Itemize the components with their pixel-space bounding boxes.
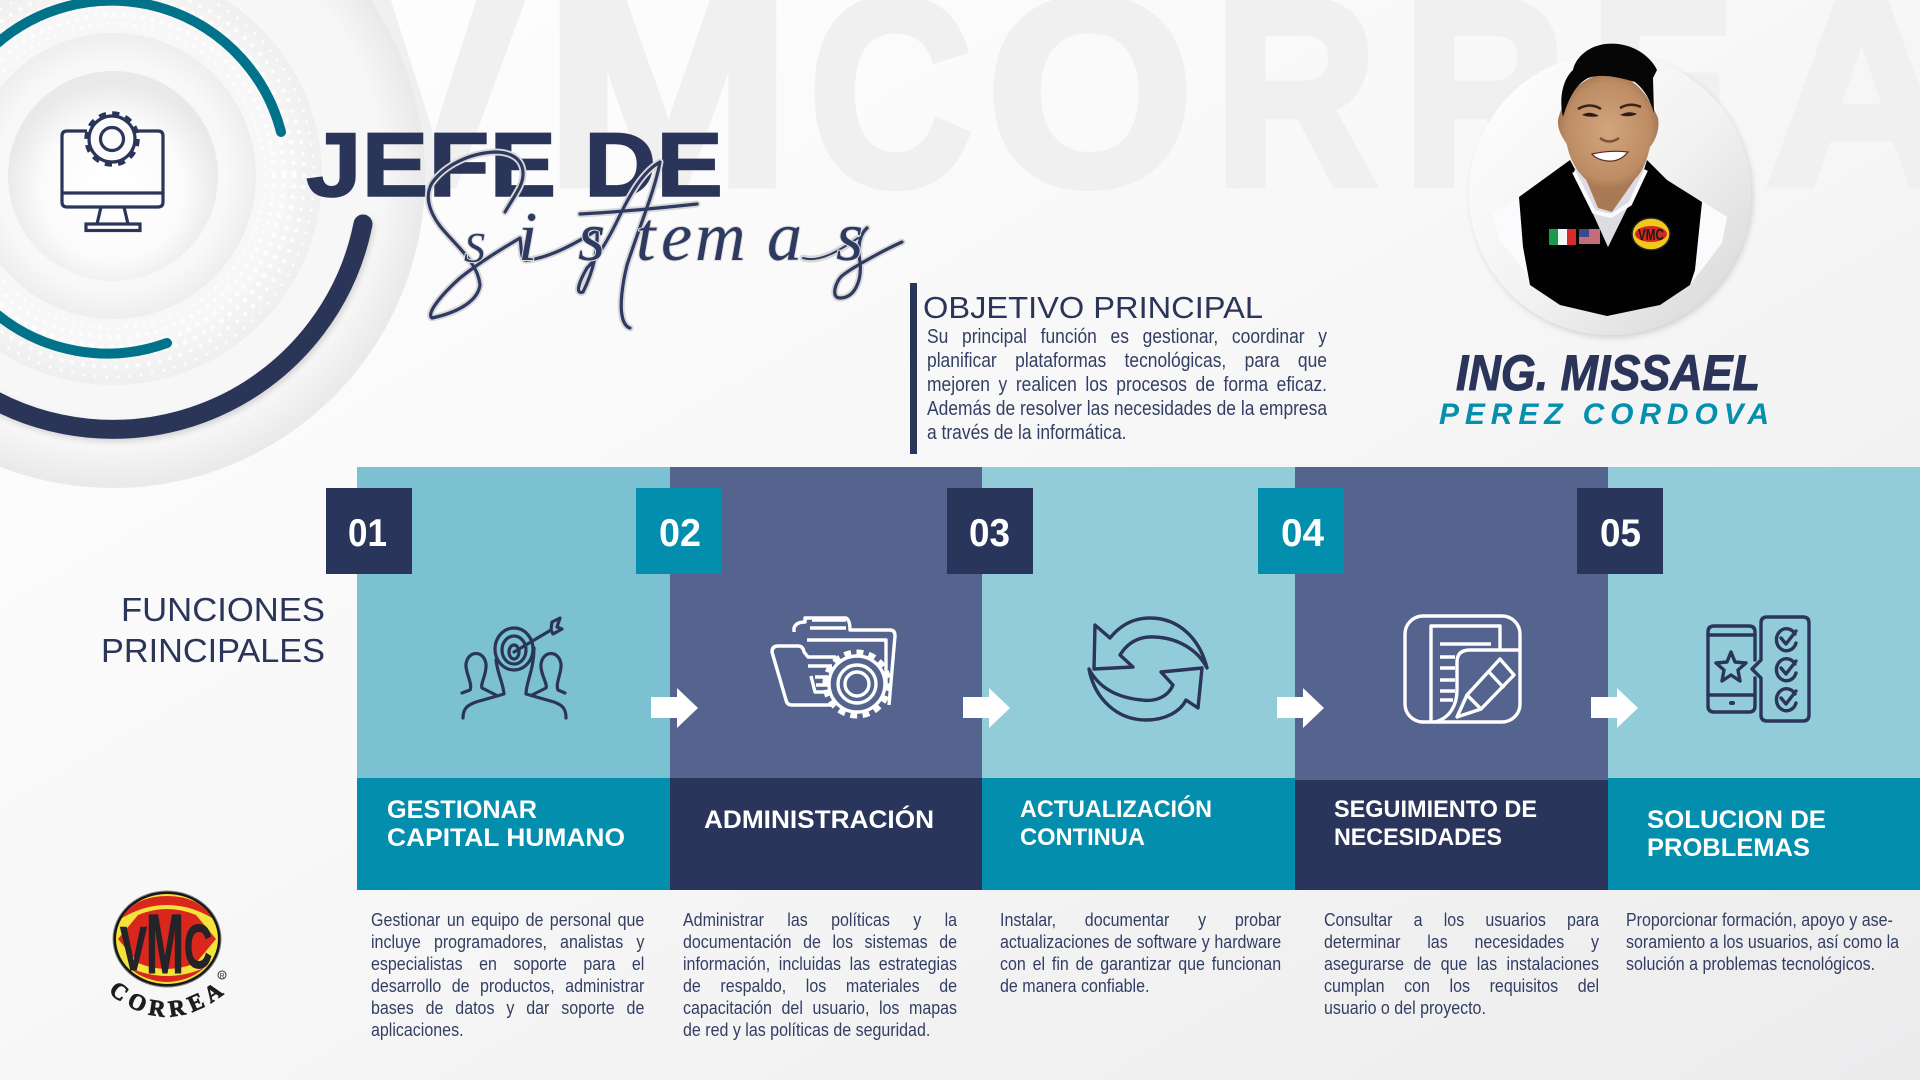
eyebrows xyxy=(1578,105,1641,109)
description: actualizacion: de manera confiable. xyxy=(1000,975,1149,996)
objective text: a través de la informática. xyxy=(926,421,1126,444)
description: gestionar: aplicaciones. xyxy=(371,1019,464,1040)
navy arc xyxy=(0,224,363,429)
description: administracion: información, incluidas las estrategias xyxy=(683,953,957,974)
collar xyxy=(1574,170,1646,216)
description: solucion: soramiento a los usuarios, así como la xyxy=(1626,931,1899,952)
description: administracion: de respaldo, los materiales de xyxy=(683,975,957,996)
icon: folder with gear xyxy=(772,618,895,716)
description: gestionar: desarrollo de productos, administrar xyxy=(371,975,644,996)
icon: monitor with gear xyxy=(62,114,163,230)
panel: column 1 gestionar xyxy=(357,467,670,890)
heading: gestionar capital humano: GESTIONAR xyxy=(387,796,537,824)
hair xyxy=(1561,44,1657,117)
face xyxy=(1558,73,1659,189)
heading: seguimiento de necesidades: NECESIDADES xyxy=(1334,824,1502,851)
concentric circle decoration xyxy=(0,0,425,488)
description: solucion: solución a problemas tecnológicos. xyxy=(1626,953,1875,974)
shirt sleeves xyxy=(1510,200,1727,284)
number badge 05 xyxy=(1577,488,1663,574)
portrait xyxy=(1492,44,1727,316)
name: ING. MISSAEL: ING. MISSAEL xyxy=(1456,345,1760,401)
arrow 4 xyxy=(1591,688,1638,728)
description: seguimiento: cumplan con los requisitos del xyxy=(1324,975,1599,996)
watermark: VMCORREA xyxy=(345,0,1920,241)
heading: actualizacion continua: CONTINUA xyxy=(1020,824,1145,851)
description: actualizacion: actualizaciones de software y hardware xyxy=(1000,931,1281,952)
description: gestionar: Gestionar un equipo de personal que xyxy=(371,909,644,930)
icon: document with pencil xyxy=(1405,616,1520,722)
icon: target with people xyxy=(462,618,566,718)
vest xyxy=(1519,160,1702,316)
logo: VMC Correa: CORREA xyxy=(111,983,225,1018)
description: solucion xyxy=(1626,909,1900,974)
description: solucion: Proporcionar formación, apoyo y ase- xyxy=(1626,909,1892,930)
objective text: mejoren y realicen los procesos de forma eficaz. xyxy=(926,373,1327,396)
number badge 02: 02 xyxy=(659,512,701,555)
number badge 02 xyxy=(636,488,722,574)
title: JEFE DE: JEFE DE xyxy=(306,115,723,216)
objective text xyxy=(926,325,1328,444)
logo: VMC Correa: V xyxy=(120,915,147,984)
heading: administracion: ADMINISTRACIÓN xyxy=(704,804,934,834)
heading: solucion de problemas: SOLUCION DE xyxy=(1647,806,1826,834)
logo: VMC Correa: M xyxy=(146,897,184,991)
arrow 1 xyxy=(651,688,698,728)
heading: gestionar capital humano xyxy=(387,796,625,852)
description: seguimiento: Consultar a los usuarios para xyxy=(1324,909,1599,930)
flags xyxy=(1549,229,1558,245)
heading: actualizacion continua: ACTUALIZACIÓN xyxy=(1020,795,1212,823)
eyes xyxy=(1582,112,1637,117)
objective bar xyxy=(910,283,917,454)
name: PEREZ CORDOVA: PEREZ CORDOVA xyxy=(1439,398,1769,431)
portrait: VMC xyxy=(1638,227,1664,244)
panel: column 4 seguimiento xyxy=(1295,467,1608,890)
description: seguimiento: determinar las necesidades y xyxy=(1324,931,1599,952)
objective text: Además de resolver las necesidades de la empresa xyxy=(926,397,1327,420)
title script: Sistemas xyxy=(428,152,902,328)
number badge 04: 04 xyxy=(1281,512,1324,555)
description: administracion: de red y las políticas de seguridad. xyxy=(683,1019,930,1040)
number badge 03: 03 xyxy=(969,512,1010,555)
panel: column 3 actualizacion xyxy=(982,467,1295,890)
description: seguimiento: asegurarse de que las instalaciones xyxy=(1324,953,1599,974)
arrow 3 xyxy=(1277,688,1324,728)
description: seguimiento: usuario o del proyecto. xyxy=(1324,997,1486,1018)
description: administracion: documentación de los sistemas de xyxy=(683,931,957,952)
objective text: Su principal función es gestionar, coordinar y xyxy=(926,325,1327,348)
title script: Sistemas: istemas xyxy=(518,199,863,276)
description: actualizacion xyxy=(1000,909,1281,996)
panel: column 5 solucion xyxy=(1608,467,1920,890)
vest logo xyxy=(1632,218,1670,250)
arrow 2 xyxy=(963,688,1010,728)
number badge 03 xyxy=(947,488,1033,574)
label: FUNCIONES PRINCIPALES: FUNCIONES xyxy=(121,591,325,628)
neck xyxy=(1586,178,1636,212)
teal arc bottom xyxy=(0,312,167,354)
description: actualizacion: Instalar, documentar y probar xyxy=(1000,909,1281,930)
number badge 05: 05 xyxy=(1600,512,1641,555)
heading: actualizacion continua xyxy=(1020,795,1212,851)
description: gestionar xyxy=(371,909,644,1040)
icon: refresh arrows xyxy=(1089,618,1207,720)
logo: VMC Correa xyxy=(111,890,226,1018)
number badge 01: 01 xyxy=(348,512,387,555)
description: administracion xyxy=(683,909,958,1040)
logo: VMC Correa: C xyxy=(184,913,212,982)
description: gestionar: especialistas en soporte para el xyxy=(371,953,644,974)
heading: solucion de problemas xyxy=(1647,806,1826,862)
label: FUNCIONES PRINCIPALES: PRINCIPALES xyxy=(101,632,325,669)
description: actualizacion: con el fin de garantizar que funcionan xyxy=(1000,953,1281,974)
description: gestionar: incluye programadores, analistas y xyxy=(371,931,644,952)
shirt front xyxy=(1574,160,1645,247)
heading: seguimiento de necesidades xyxy=(1334,796,1537,851)
heading: gestionar capital humano: CAPITAL HUMANO xyxy=(387,824,625,852)
heading: solucion de problemas: PROBLEMAS xyxy=(1647,834,1810,862)
number badge 01 xyxy=(326,488,412,574)
panel: column 2 administracion xyxy=(670,467,982,890)
photo disc xyxy=(1469,53,1751,335)
objective text: planificar plataformas tecnológicas, para que xyxy=(926,349,1327,372)
mouth xyxy=(1592,151,1628,161)
description: seguimiento xyxy=(1324,909,1600,1018)
description: administracion: Administrar las políticas y la xyxy=(683,909,957,930)
teal arc top xyxy=(0,1,281,132)
number badge 04 xyxy=(1258,488,1344,574)
description: gestionar: bases de datos y dar soporte de xyxy=(371,997,644,1018)
icon: phone and checklist xyxy=(1708,617,1809,721)
logo: VMC Correa: R xyxy=(219,973,225,980)
nose xyxy=(1600,138,1619,142)
title script: Sistemas: S xyxy=(464,226,485,272)
description: administracion: capacitación del usuario, los mapas xyxy=(683,997,957,1018)
objective heading: OBJETIVO PRINCIPAL xyxy=(923,290,1263,325)
label: FUNCIONES PRINCIPALES xyxy=(101,591,325,669)
heading: seguimiento de necesidades: SEGUIMIENTO DE xyxy=(1334,796,1537,823)
